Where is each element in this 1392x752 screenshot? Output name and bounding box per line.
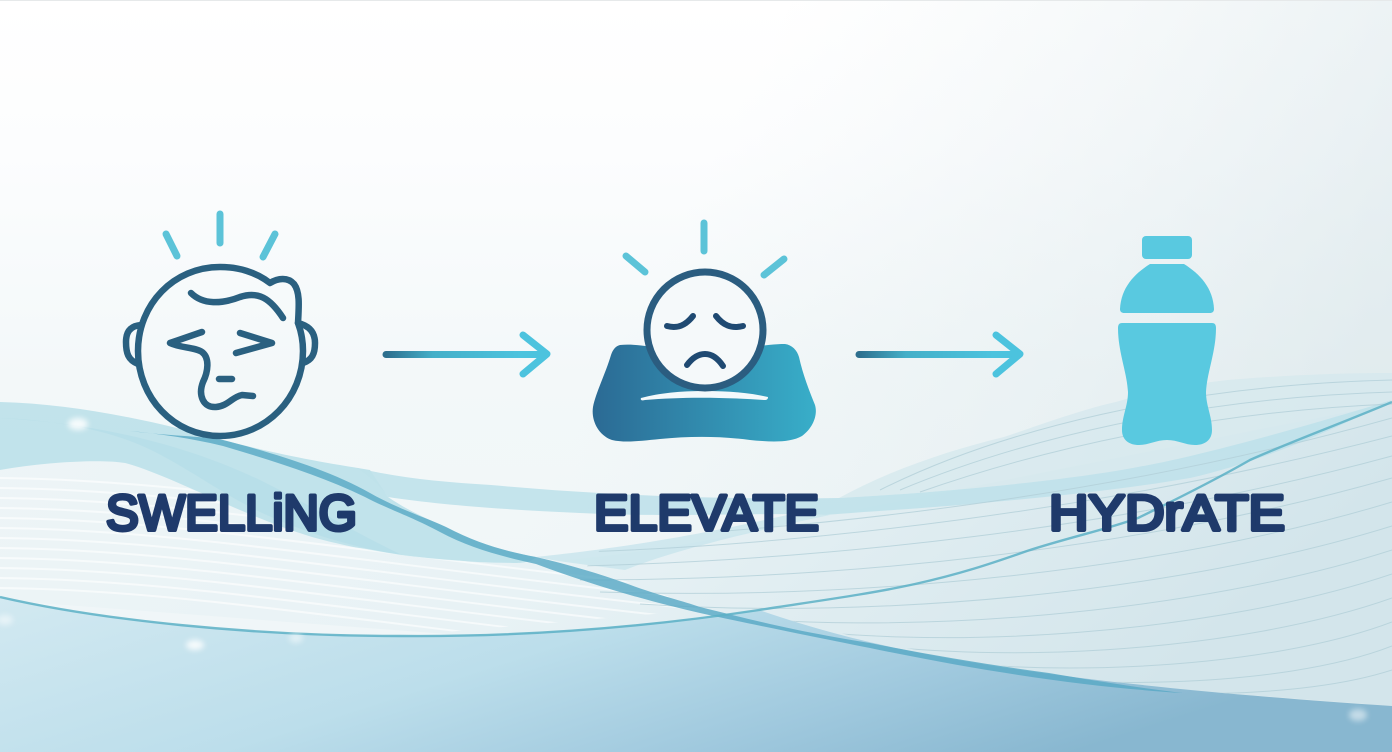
hair line	[191, 293, 283, 318]
middle light band	[357, 400, 1392, 515]
step 1: swelling	[106, 214, 357, 541]
icon: swollen face	[126, 214, 315, 436]
right ear	[298, 323, 315, 363]
thin rising curve	[0, 402, 1392, 636]
label: hydrate: HYDrATE	[1049, 485, 1285, 541]
icon: water bottle	[1118, 236, 1216, 445]
face outline with hair	[138, 267, 303, 436]
icon: pain rays	[166, 214, 275, 257]
wave ribbons	[0, 373, 1392, 752]
pillow highlight	[641, 391, 768, 400]
left inner shading	[0, 418, 402, 555]
bottom blue region	[0, 597, 1392, 752]
left ear	[126, 325, 141, 364]
right eye	[236, 333, 272, 353]
arrow: elevate to hydrate	[859, 335, 1020, 374]
dark diagonal ribbon	[130, 431, 1183, 693]
nose dash	[219, 376, 232, 382]
lower centre band	[536, 512, 830, 570]
left eye and nose	[170, 332, 253, 407]
fine lines right	[580, 380, 1392, 693]
bottle shoulder	[1120, 264, 1214, 313]
step 3: hydrate	[1049, 236, 1285, 541]
label: swelling: SWELLiNG	[106, 485, 357, 541]
icon: pain rays	[626, 223, 784, 275]
arrow: swelling to elevate	[386, 335, 547, 374]
left light band	[0, 402, 536, 563]
bottle cap	[1142, 236, 1192, 259]
lower sheet	[0, 403, 1392, 706]
bottle body	[1118, 323, 1216, 445]
label: elevate: ELEVATE	[594, 485, 819, 541]
icon: sad face	[626, 223, 784, 388]
upper right faint wave	[839, 373, 1392, 498]
step 2: elevate	[593, 223, 819, 541]
sparkles	[0, 418, 1367, 721]
white stripes left	[0, 477, 680, 632]
icon: pillow	[593, 344, 816, 442]
